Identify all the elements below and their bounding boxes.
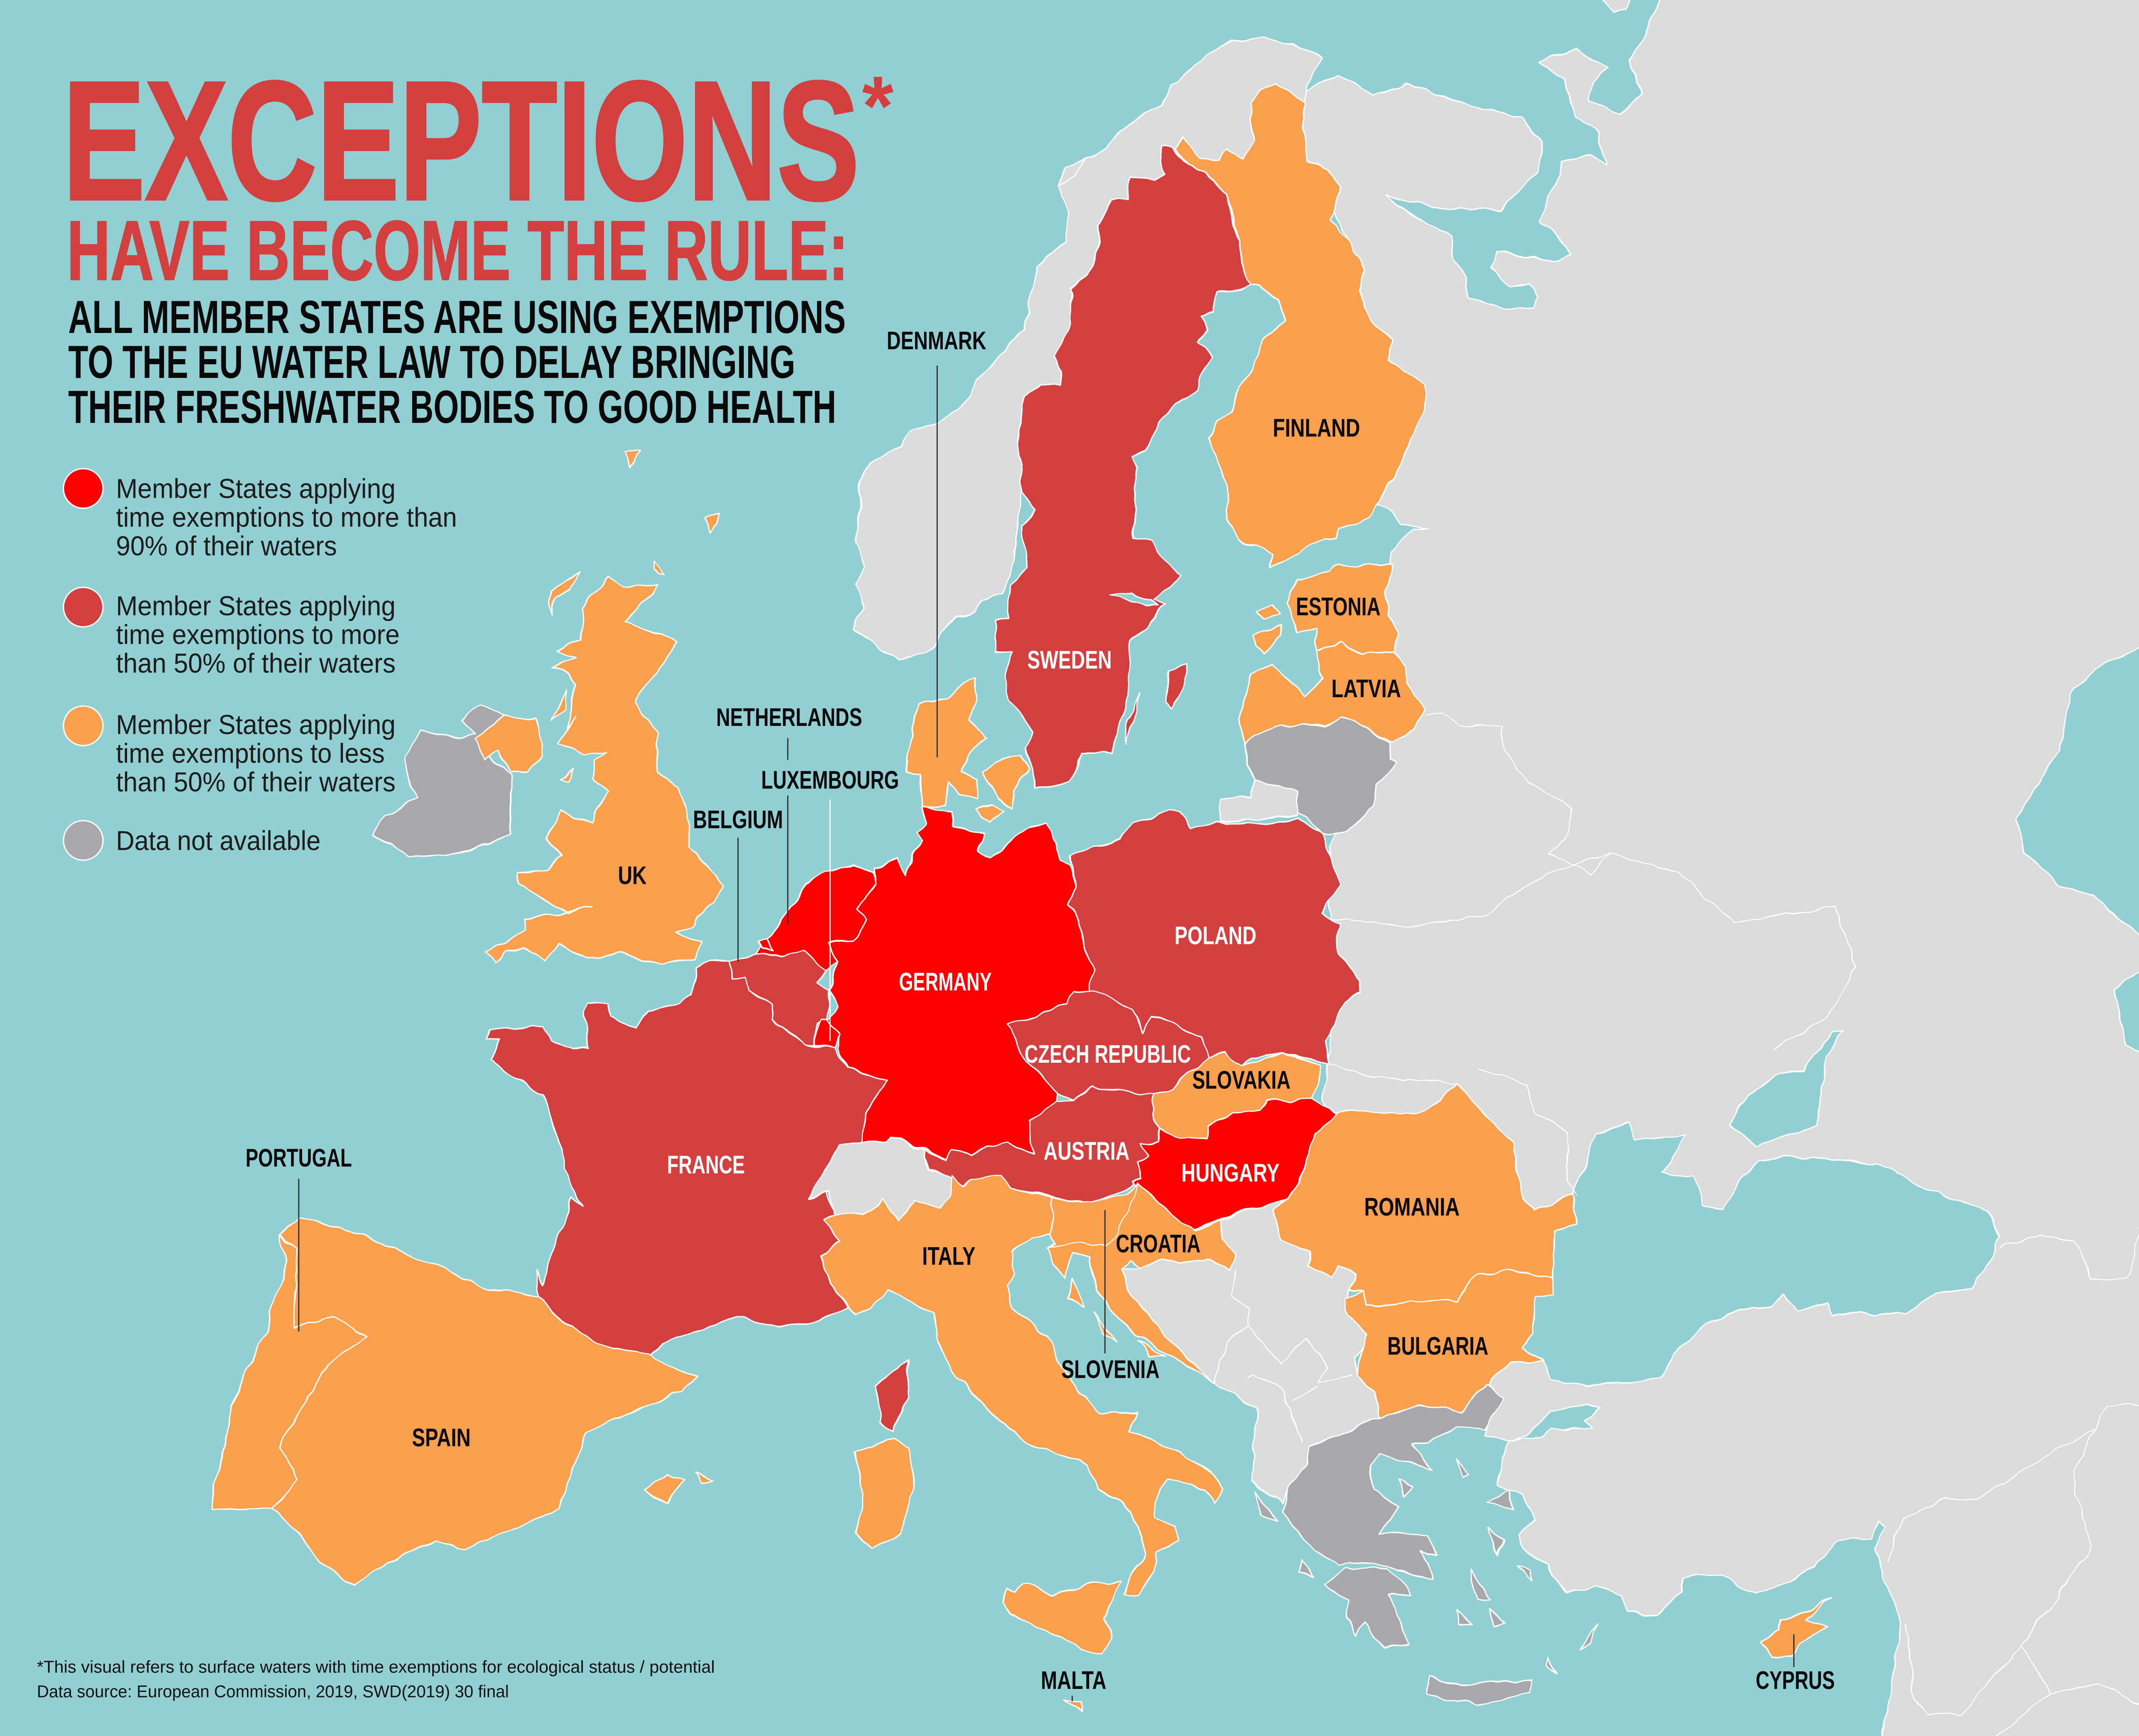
country labels: CZECH REPUBLIC xyxy=(1025,1040,1191,1068)
Sweden xyxy=(995,147,1251,788)
legend item: more than 50%: time exemptions to more xyxy=(116,619,400,650)
headline statement: ALL MEMBER STATES ARE USING EXEMPTIONS xyxy=(68,291,846,343)
Greek islands xyxy=(1257,1458,1596,1675)
Caspian Sea, southern part xyxy=(2115,955,2139,1064)
Belgium xyxy=(728,951,828,1045)
country labels: NETHERLANDS xyxy=(716,704,862,731)
country labels: UK xyxy=(618,862,647,890)
legend item: data not available xyxy=(63,820,321,860)
Portugal xyxy=(211,1235,365,1507)
Slovenia border xyxy=(1048,1183,1138,1248)
footnote xyxy=(37,1658,715,1701)
Italy xyxy=(821,1174,1224,1596)
country labels: CYPRUS xyxy=(1756,1667,1835,1694)
legend xyxy=(63,469,457,860)
country labels: SPAIN xyxy=(412,1424,471,1452)
legend item: less than 50% xyxy=(63,706,395,797)
Caspian Sea xyxy=(2015,627,2139,955)
Germany xyxy=(828,806,1093,1159)
UK islands xyxy=(550,449,720,780)
legend item: less than 50%: time exemptions to less xyxy=(116,738,385,769)
country labels: HUNGARY xyxy=(1181,1159,1280,1187)
title: EXCEPTIONS xyxy=(63,46,859,235)
Austria xyxy=(925,1086,1159,1203)
Denmark islands xyxy=(975,756,1027,823)
UK xyxy=(486,574,723,963)
legend item: less than 50%: than 50% of their waters xyxy=(116,767,395,797)
Ireland xyxy=(375,705,513,857)
Sea of Marmara xyxy=(1510,1405,1600,1442)
Latvia xyxy=(1240,641,1426,745)
Sea of Azov xyxy=(1730,1029,1845,1146)
Czech Republic xyxy=(1007,990,1210,1103)
country labels: POLAND xyxy=(1174,922,1257,950)
country labels: BULGARIA xyxy=(1387,1332,1488,1360)
Northern Ireland xyxy=(475,716,543,772)
country labels: LATVIA xyxy=(1331,675,1401,703)
Sicily xyxy=(1003,1581,1121,1653)
Bulgaria xyxy=(1346,1270,1552,1418)
Lithuania xyxy=(1245,718,1398,835)
Hungary xyxy=(1132,1097,1338,1229)
Corsica xyxy=(876,1359,909,1433)
Switzerland xyxy=(808,1138,952,1221)
Swedish lake xyxy=(1111,594,1159,607)
country labels: FINLAND xyxy=(1273,414,1360,442)
Black Sea xyxy=(1522,1123,2001,1386)
Balearic Islands xyxy=(644,1474,713,1504)
legend item: more than 90%: time exemptions to more than xyxy=(116,502,457,532)
Peloponnese xyxy=(1326,1567,1412,1647)
France xyxy=(487,960,887,1358)
Spain xyxy=(273,1217,696,1587)
Eastern European and Middle Eastern borders xyxy=(1215,715,2139,1736)
Croatian islands xyxy=(1068,1278,1166,1356)
non-EU land: Russia, Eastern Europe and Turkey xyxy=(1296,0,2139,1736)
footnote: *This visual refers to surface waters with time exemptions for ecological status / potential xyxy=(37,1658,715,1677)
Estonian islands xyxy=(1254,603,1281,655)
Slovakia xyxy=(1151,1052,1322,1139)
country labels: SWEDEN xyxy=(1027,646,1112,674)
Finland xyxy=(1174,82,1426,568)
legend item: more than 90%: 90% of their waters xyxy=(116,530,337,561)
country labels: FRANCE xyxy=(667,1151,745,1179)
legend item: more than 50%: Member States applying xyxy=(116,591,395,621)
footnote: Data source: European Commission, 2019, SWD(2019) 30 final xyxy=(37,1682,509,1701)
Kaliningrad xyxy=(1221,780,1297,821)
country labels: ITALY xyxy=(922,1243,975,1270)
Norway northern islands xyxy=(1057,161,1084,186)
leader lines xyxy=(299,366,1794,1701)
Greece mainland xyxy=(1281,1385,1505,1581)
Gotland xyxy=(1166,663,1185,710)
Balkan non-member land xyxy=(1121,1199,1379,1504)
headline statement xyxy=(68,291,846,433)
Romania xyxy=(1273,1083,1576,1305)
legend item: more than 50%: than 50% of their waters xyxy=(116,648,395,678)
Norway xyxy=(856,38,1322,660)
Cyprus xyxy=(1760,1596,1833,1658)
Slovenia and Croatia xyxy=(1048,1183,1235,1382)
headline statement: TO THE EU WATER LAW TO DELAY BRINGING xyxy=(68,336,795,388)
country labels: GERMANY xyxy=(899,968,992,996)
legend item: more than 90%: Member States applying xyxy=(116,473,395,504)
Novaya Zemlya fragment xyxy=(1599,0,1634,14)
country labels: DENMARK xyxy=(887,327,986,355)
country labels: SLOVENIA xyxy=(1061,1356,1159,1383)
Netherlands island xyxy=(758,941,773,951)
Estonia xyxy=(1286,565,1398,655)
country labels: PORTUGAL xyxy=(246,1144,352,1172)
country labels: ESTONIA xyxy=(1296,593,1381,621)
country labels: CROATIA xyxy=(1116,1230,1200,1258)
Denmark xyxy=(907,677,985,808)
Sardinia xyxy=(856,1439,914,1550)
legend item: more than 90% xyxy=(63,469,457,561)
Oland xyxy=(1127,694,1139,745)
legend item: less than 50%: Member States applying xyxy=(116,709,395,740)
country labels: AUSTRIA xyxy=(1043,1137,1129,1165)
country labels: ROMANIA xyxy=(1364,1193,1460,1221)
Crete xyxy=(1428,1677,1533,1705)
country labels xyxy=(246,327,1835,1694)
country labels: LUXEMBOURG xyxy=(761,766,899,794)
title: * xyxy=(862,59,894,153)
Poland xyxy=(1068,810,1360,1065)
country labels: BELGIUM xyxy=(693,806,783,834)
Netherlands xyxy=(756,865,876,970)
country labels: MALTA xyxy=(1041,1667,1106,1694)
country labels: SLOVAKIA xyxy=(1192,1067,1290,1094)
legend item: more than 50% xyxy=(63,587,400,678)
Malta xyxy=(1064,1700,1080,1711)
headline statement: THEIR FRESHWATER BODIES TO GOOD HEALTH xyxy=(68,381,836,433)
subtitle: HAVE BECOME THE RULE: xyxy=(67,203,849,297)
Luxembourg xyxy=(814,1020,841,1049)
legend item: data not available: Data not available xyxy=(116,825,321,856)
